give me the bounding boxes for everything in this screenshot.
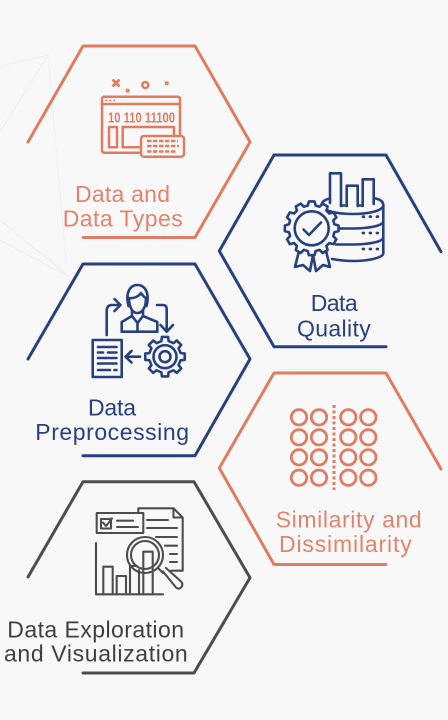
label: data preprocessing: Data bbox=[88, 395, 136, 421]
panel: data exploration and visualization bbox=[4, 482, 250, 673]
label: data and data types: Data Types bbox=[63, 206, 183, 232]
panel: data quality bbox=[219, 155, 441, 347]
hexagon outline: data exploration and visualization bbox=[28, 482, 250, 673]
label: data exploration and visualization: and Visualization bbox=[4, 641, 188, 667]
icon: quality badge and database bbox=[285, 173, 383, 271]
panel: similarity and dissimilarity bbox=[219, 373, 441, 564]
label: data quality: Quality bbox=[297, 316, 371, 342]
icon: binary window and keyboard: 10 110 11100 bbox=[108, 110, 175, 126]
hexagon outline: data quality bbox=[219, 155, 441, 347]
hexagon outline: data and data types bbox=[28, 46, 250, 238]
icon: paired circles with dotted divider bbox=[291, 405, 376, 490]
label: similarity and dissimilarity: Similarity and bbox=[276, 507, 422, 533]
icon: report, bar chart and magnifier bbox=[96, 508, 183, 594]
label: data preprocessing: Preprocessing bbox=[35, 419, 189, 445]
icon: person, document and gear cycle bbox=[93, 285, 185, 377]
label: data and data types: Data and bbox=[75, 181, 170, 207]
panel: data and data types bbox=[28, 46, 250, 238]
icon: binary window and keyboard bbox=[102, 80, 184, 157]
label: similarity and dissimilarity: Dissimilarity bbox=[279, 531, 412, 557]
hexagon outline: data preprocessing bbox=[28, 264, 250, 456]
label: data quality: Data bbox=[311, 290, 358, 316]
hexagon outline: similarity and dissimilarity bbox=[219, 373, 441, 564]
panel: data preprocessing bbox=[28, 264, 250, 456]
label: data exploration and visualization: Data Exploration bbox=[7, 616, 184, 642]
